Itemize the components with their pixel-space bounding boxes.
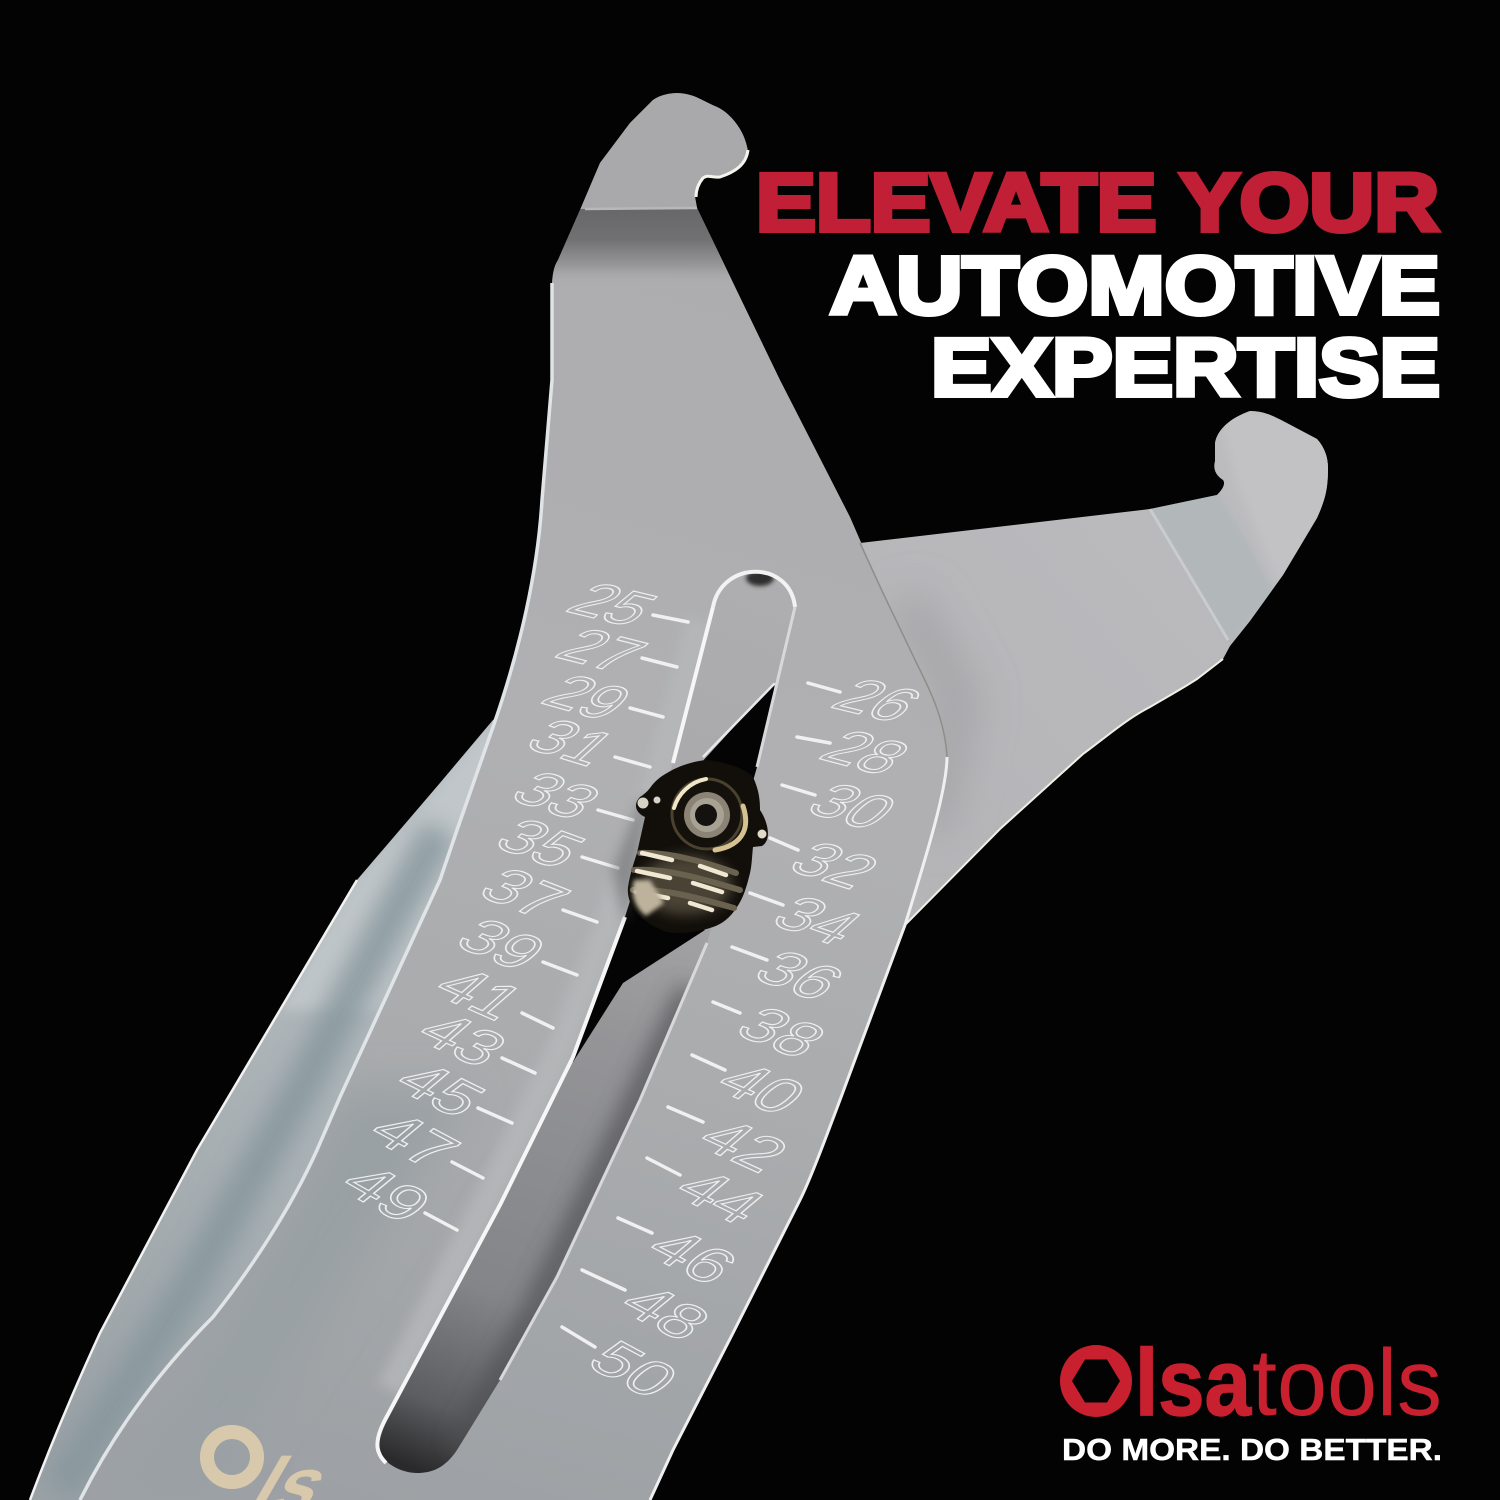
bolt body [628,760,768,933]
slot top shadow [746,570,774,586]
headline line 1: ELEVATE YOUR [756,158,1439,248]
measuring slot [376,570,795,1473]
hook lip highlight [696,150,748,197]
headline line 3: EXPERTISE [931,322,1440,414]
logo: Olsatools [1060,1330,1442,1467]
back blade edge highlights [30,880,357,1500]
right scale numbers: 48 [606,1273,725,1351]
wordmark: lsa [1135,1330,1252,1436]
wordmark: tools [1252,1330,1442,1436]
icon: adjustment bolt [612,760,768,933]
hook head [580,93,748,209]
ridge beside slot [390,620,700,1390]
left scale numbers: 47 [356,1101,474,1180]
left scale numbers [328,573,671,1233]
front blade [87,93,904,1500]
bolt lower sheen [640,855,732,915]
bolt lobe highlight [633,880,664,916]
back blade [31,411,1328,1500]
left scale numbers: 29 [528,665,646,730]
scale ticks [425,615,840,1347]
right scale numbers: 34 [758,886,876,955]
bolt ribs [633,853,740,908]
right scale numbers: 28 [806,721,924,785]
right scale numbers: 44 [661,1159,779,1234]
left scale numbers: 33 [497,761,615,830]
headline line 2: AUTOMOTIVE [830,240,1440,332]
left scale numbers: 43 [403,1002,521,1077]
right scale numbers: 30 [793,774,911,840]
left scale numbers: 27 [542,619,660,683]
left scale numbers: 39 [442,909,560,981]
bolt collar highlights [674,779,706,808]
left scale numbers: 25 [553,573,671,636]
bolt nut [684,792,730,838]
icon: hexagon O [1060,1345,1132,1417]
tagline: DO MORE. DO BETTER. [1062,1432,1442,1467]
printed brand mark on blade [207,1432,346,1500]
slot black wedges [703,682,775,779]
right scale numbers: 26 [818,669,936,732]
slot inner shadow [460,990,690,1450]
right scale numbers: 40 [702,1052,820,1125]
left scale numbers: 49 [328,1153,446,1233]
left scale numbers: 45 [381,1051,499,1128]
left scale numbers: 35 [481,809,599,879]
headline [756,158,1440,414]
left scale numbers: 41 [420,957,538,1031]
bolt collar [672,779,742,849]
right scale numbers: 46 [633,1217,752,1295]
bolt shadow [612,800,650,925]
hook bevel [552,209,732,280]
right scale numbers: 32 [775,832,893,899]
right scale numbers: 42 [684,1109,802,1183]
left scale numbers: 31 [512,709,630,776]
right scale numbers: 36 [740,940,858,1011]
front blade right edge highlights [650,757,947,1500]
right scale numbers [574,669,936,1408]
bolt nubs [638,798,648,808]
left scale numbers: 37 [465,858,583,929]
front blade left edge and groove ridge [80,283,552,1500]
right scale numbers: 50 [574,1330,693,1408]
right scale numbers: 38 [722,997,840,1068]
